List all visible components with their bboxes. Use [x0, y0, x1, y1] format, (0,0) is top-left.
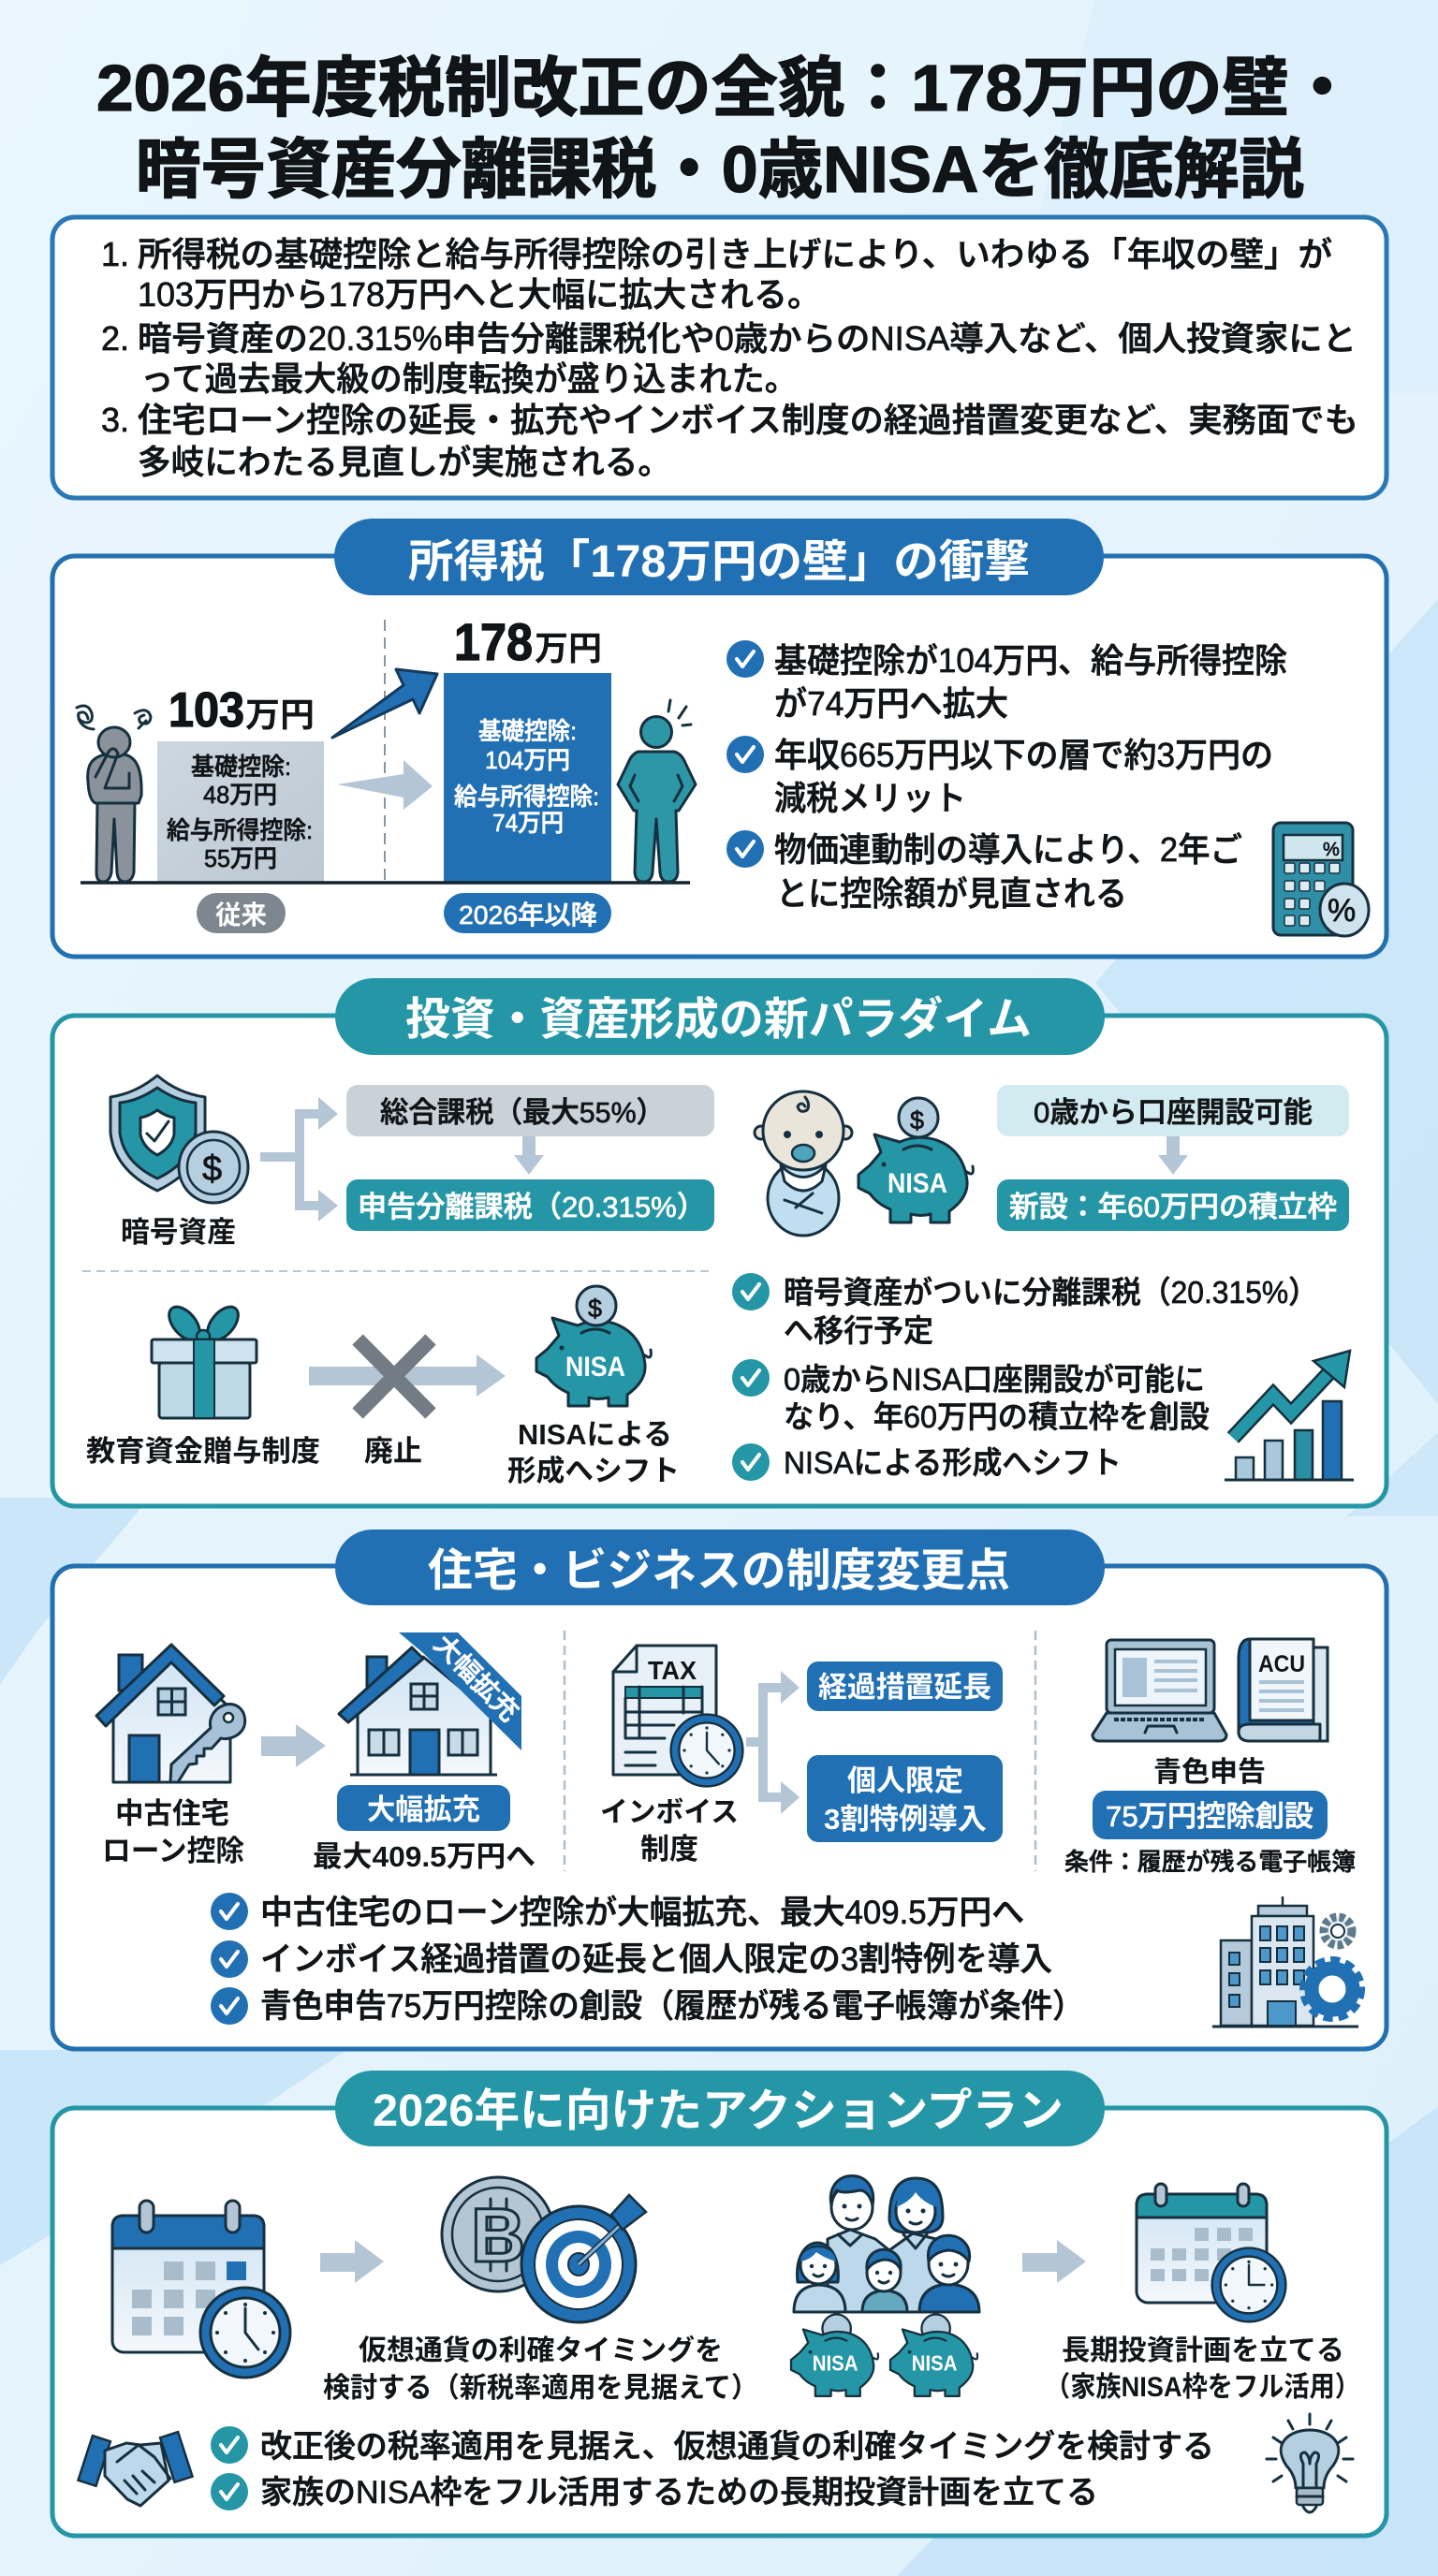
arrow: rise from 103 to 178 — [332, 669, 437, 738]
panel: summary: 住宅ローン控除の延長・拡充やインボイス制度の経過措置変更など、実務面でも — [138, 401, 1358, 439]
arrow: down — [514, 1136, 544, 1175]
label: used home loan — [102, 1797, 244, 1867]
chart: before and after bars: 基礎控除: — [478, 717, 577, 745]
icon: ledger book — [1239, 1639, 1328, 1741]
box: new allowance — [997, 1179, 1349, 1231]
arrow: crypto branch — [260, 1097, 338, 1222]
icon: NISA piggy bank: NISA — [888, 1168, 947, 1199]
box: separate taxation — [346, 1179, 714, 1231]
icon: light bulb — [1267, 2414, 1353, 2512]
box: special rule — [807, 1755, 1003, 1842]
checklist: action — [211, 2426, 1214, 2510]
checklist: income tax: とに控除額が見直される — [776, 874, 1127, 913]
box: new allowance: 新設：年60万円の積立枠 — [1009, 1191, 1337, 1223]
box: separate taxation: 申告分離課税（20.315%） — [358, 1191, 706, 1223]
icon: tax document and clock — [613, 1646, 742, 1786]
icon: worried person — [77, 706, 151, 882]
label: invoice system: 制度 — [640, 1833, 698, 1866]
heading: action plan — [335, 2071, 1105, 2146]
label: abolished: 廃止 — [364, 1435, 422, 1468]
arrow: comparison — [337, 760, 433, 810]
chart: before and after bars: 178 — [454, 612, 533, 671]
icon: bitcoin and target — [442, 2177, 646, 2322]
label: big expansion: 大幅拡充 — [367, 1793, 480, 1826]
title: 2026年度税制改正の全貌：178万円の壁・ — [96, 51, 1356, 124]
heading: investment — [335, 978, 1105, 1055]
arrow: step one — [320, 2240, 384, 2283]
label: crypto timing: 検討する（新税率適用を見据えて） — [323, 2373, 758, 2404]
heading: income tax wall: 所得税「178万円の壁」の衝撃 — [408, 537, 1030, 587]
icon: expanded house with ribbon: 大幅拡充 — [429, 1630, 524, 1727]
label: before — [197, 893, 286, 933]
checklist: investment: NISAによる形成へシフト — [784, 1445, 1122, 1480]
label: used home loan: 中古住宅 — [115, 1797, 229, 1830]
checklist: income tax: 年収665万円以下の層で約3万円の — [774, 736, 1273, 774]
icon: expanded house with ribbon — [339, 1630, 524, 1775]
label: used home loan: ローン控除 — [102, 1835, 244, 1867]
arrow: to expanded home — [261, 1724, 326, 1767]
chart: before and after bars: 万円 — [245, 695, 315, 734]
title — [96, 51, 1356, 206]
icon: calculator — [1273, 823, 1369, 936]
icon: happy person — [618, 700, 696, 882]
icon: crypto shield — [110, 1076, 248, 1203]
label: invoice system — [600, 1797, 739, 1866]
box: comprehensive taxation — [346, 1085, 714, 1136]
chart: before and after bars: 基礎控除: — [191, 753, 291, 781]
checklist: housing: 青色申告75万円控除の創設（履歴が残る電子帳簿が条件） — [260, 1988, 1084, 2025]
label: long-term plan — [1045, 2335, 1360, 2403]
box: open from age 0: 0歳から口座開設可能 — [1034, 1096, 1313, 1129]
icon: tax document and clock: TAX — [648, 1656, 697, 1685]
label: big expansion — [337, 1785, 510, 1831]
icon: teal calendar and clock — [1137, 2184, 1285, 2321]
panel: summary: って過去最大級の制度転換が盛り込まれた。 — [140, 359, 798, 398]
label: after 2026 — [444, 893, 611, 933]
checklist: investment: 暗号資産がついに分離課税（20.315%） — [784, 1275, 1318, 1310]
panel: summary: 3. — [101, 401, 129, 439]
checklist: action: 家族のNISA枠をフル活用するための長期投資計画を立てる — [260, 2475, 1098, 2510]
label: crypto timing: 仮想通貨の利確タイミングを — [359, 2335, 723, 2366]
box: special rule: 個人限定 — [847, 1764, 963, 1797]
icon: calculator: % — [1328, 893, 1356, 929]
checklist: housing: 中古住宅のローン控除が大幅拡充、最大409.5万円へ — [260, 1895, 1024, 1931]
icon: family NISA piggy banks — [791, 2315, 977, 2396]
label: shift to NISA — [507, 1418, 680, 1487]
panel: summary: 103万円から178万円へと大幅に拡大される。 — [138, 275, 821, 314]
chart: before and after bars — [81, 612, 690, 883]
icon: family NISA piggy banks: NISA — [813, 2351, 858, 2376]
icon: handshake — [78, 2432, 193, 2506]
box: extension — [807, 1661, 1003, 1711]
chart: before and after bars: 給与所得控除: — [454, 783, 599, 811]
panel: housing and business — [52, 1530, 1387, 2049]
chart: before and after bars: 55万円 — [204, 844, 277, 872]
chart: before and after bars: 給与所得控除: — [167, 816, 313, 844]
box: extension: 経過措置延長 — [818, 1671, 991, 1704]
label: invoice system: インボイス — [600, 1797, 739, 1828]
checklist: investment: なり、年60万円の積立枠を創設 — [784, 1399, 1210, 1434]
icon: laptop — [1093, 1640, 1226, 1741]
heading: housing — [335, 1530, 1105, 1605]
label: before: 従来 — [215, 900, 267, 929]
label: condition: 条件：履歴が残る電子帳簿 — [1064, 1848, 1356, 1876]
panel: action plan — [52, 2071, 1387, 2536]
title: 暗号資産分離課税・0歳NISAを徹底解説 — [136, 133, 1304, 206]
checklist: investment — [732, 1273, 1318, 1481]
icon: crypto shield: $ — [202, 1149, 222, 1189]
heading: housing: 住宅・ビジネスの制度変更点 — [428, 1546, 1010, 1596]
icon: NISA piggy bank: NISA — [565, 1352, 625, 1383]
chart: growth bars — [1225, 1351, 1354, 1480]
panel: summary: 多岐にわたる見直しが実施される。 — [138, 443, 671, 481]
checklist: income tax: が74万円へ拡大 — [774, 684, 1008, 723]
chart: before and after bars: 48万円 — [203, 781, 277, 809]
label: 750k deduction: 75万円控除創設 — [1106, 1800, 1313, 1833]
checklist: housing: インボイス経過措置の延長と個人限定の3割特例を導入 — [260, 1941, 1052, 1978]
heading: income tax wall — [334, 519, 1104, 595]
icon: ledger book: ACU — [1258, 1651, 1305, 1677]
checklist: investment: へ移行予定 — [784, 1313, 933, 1348]
icon: NISA piggy bank — [858, 1098, 973, 1222]
checklist: income tax: 減税メリット — [774, 779, 966, 817]
checklist: action: 改正後の税率適用を見据え、仮想通貨の利確タイミングを検討する — [260, 2429, 1214, 2465]
checklist: income tax: 基礎控除が104万円、給与所得控除 — [774, 641, 1287, 680]
panel: summary — [52, 217, 1387, 498]
checklist: income tax: 物価連動制の導入により、2年ご — [774, 830, 1242, 869]
icon: NISA piggy bank — [536, 1286, 651, 1406]
label: shift to NISA: 形成へシフト — [507, 1455, 680, 1487]
icon: cross — [358, 1339, 431, 1413]
label: crypto: 暗号資産 — [121, 1216, 236, 1249]
panel: summary: 所得税の基礎控除と給与所得控除の引き上げにより、いわゆる「年収の壁」が — [138, 235, 1332, 273]
panel: summary: 2. — [101, 319, 129, 358]
label: long-term plan: （家族NISA枠をフル活用） — [1045, 2372, 1360, 2403]
panel: income tax wall — [52, 519, 1387, 957]
checklist: investment: 0歳からNISA口座開設が可能に — [784, 1362, 1205, 1397]
label: blue return: 青色申告 — [1153, 1757, 1266, 1788]
box: special rule: 3割特例導入 — [824, 1803, 987, 1836]
box: comprehensive taxation: 総合課税（最大55%） — [380, 1096, 665, 1129]
chart: before and after bars: 74万円 — [492, 809, 564, 837]
label: 750k deduction — [1093, 1791, 1328, 1839]
label: shift to NISA: NISAによる — [518, 1418, 672, 1451]
chart: before and after bars: 104万円 — [485, 746, 570, 774]
icon: calendar and clock — [112, 2201, 290, 2378]
checklist: income tax — [726, 640, 1287, 913]
panel: investment — [52, 978, 1387, 1506]
heading: action plan: 2026年に向けたアクションプラン — [373, 2086, 1064, 2136]
icon: gift — [152, 1301, 257, 1418]
icon: NISA piggy bank: $ — [910, 1106, 924, 1134]
arrow: down — [1158, 1136, 1188, 1175]
checklist: housing — [211, 1893, 1084, 2025]
label: education gift: 教育資金贈与制度 — [86, 1435, 320, 1468]
arrow: step two — [1022, 2240, 1086, 2283]
chart: before and after bars: 103 — [169, 683, 244, 738]
icon: bitcoin and target: B — [471, 2193, 525, 2278]
icon: baby — [755, 1091, 852, 1236]
box: open from age 0 — [997, 1085, 1349, 1136]
label: long-term plan: 長期投資計画を立てる — [1062, 2335, 1344, 2366]
icon: building and gears — [1212, 1896, 1361, 2027]
icon: family NISA piggy banks: NISA — [912, 2351, 957, 2376]
heading: investment: 投資・資産形成の新パラダイム — [405, 995, 1032, 1045]
panel: summary: 暗号資産の20.315%申告分離課税化や0歳からのNISA導入など、個人投資家にと — [138, 319, 1357, 358]
panel: summary: 1. — [101, 235, 129, 273]
label: max deduction: 最大409.5万円へ — [313, 1840, 536, 1873]
icon: family — [794, 2175, 979, 2312]
arrow: invoice branch — [746, 1671, 800, 1814]
icon: calculator: % — [1323, 840, 1340, 860]
icon: house with key — [96, 1645, 245, 1782]
arrow: blocked transition — [309, 1354, 506, 1397]
label: after 2026: 2026年以降 — [459, 900, 597, 929]
chart: before and after bars: 万円 — [535, 629, 602, 667]
icon: NISA piggy bank: $ — [588, 1295, 602, 1323]
label: crypto timing — [323, 2335, 758, 2404]
